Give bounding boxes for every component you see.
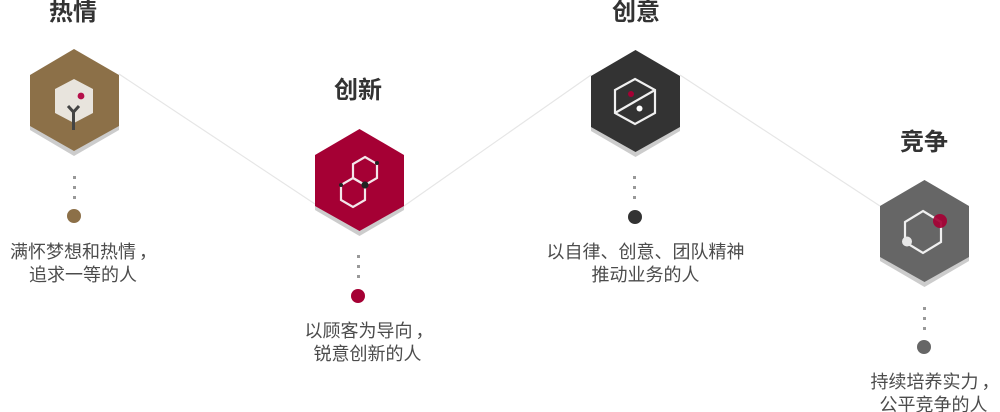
icon: split hexagon (615, 79, 655, 124)
icon: hexagon with dots (902, 211, 947, 253)
hexagon shadow (30, 54, 119, 156)
marker dot (917, 340, 931, 354)
marker dot (628, 210, 642, 224)
marker dot (351, 289, 365, 303)
hexagon shadow (315, 134, 404, 236)
hexagon shadow (880, 185, 969, 287)
hexagon (315, 129, 404, 231)
text block (546, 242, 744, 285)
text block: 追求一等的人 (29, 265, 137, 285)
dotted leader (73, 176, 76, 199)
panel: competition (870, 129, 1000, 412)
hexagon (591, 50, 680, 152)
panel: passion (10, 0, 157, 285)
text block: 以自律、创意、团队精神 (546, 242, 744, 262)
text block: 满怀梦想和热情， (10, 242, 157, 262)
text block (10, 242, 157, 285)
text block: 以顾客为导向， (304, 321, 434, 341)
panel: creativity (546, 0, 744, 285)
text block: 推动业务的人 (592, 265, 700, 285)
hexagon (880, 180, 969, 282)
hexagon shadow (591, 55, 680, 157)
dotted leader (357, 255, 360, 278)
heading: innovation: 创新 (334, 77, 382, 104)
dotted leader (633, 176, 636, 199)
heading: competition: 竞争 (900, 129, 948, 156)
text block: 锐意创新的人 (314, 344, 422, 364)
marker dot (67, 209, 81, 223)
text block (870, 372, 1000, 412)
icon: linked hexagons (339, 157, 379, 207)
text block: 持续培养实力， (870, 372, 1000, 392)
icon: tree in hexagon (55, 79, 93, 130)
text block (304, 321, 434, 364)
dotted leader (923, 307, 926, 330)
connector lines between hexagons (119, 74, 880, 206)
hexagon (30, 49, 119, 151)
panel: innovation (304, 77, 434, 364)
